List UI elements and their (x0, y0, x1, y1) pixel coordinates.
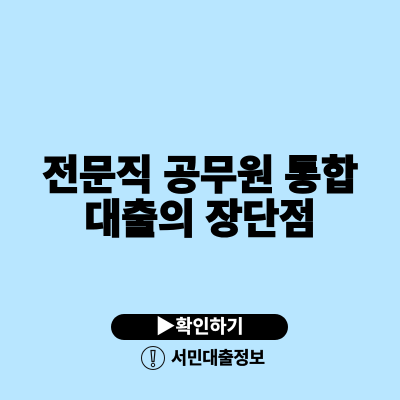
button: 확인하기 (111, 314, 288, 340)
icon: exclamation circle (141, 346, 165, 370)
brand name: 서민대출정보 (171, 348, 265, 368)
title (42, 152, 358, 242)
title: 전문직 공무원 통합 (42, 152, 358, 198)
title: 대출의 장단점 (84, 196, 316, 242)
button: 확인하기: ▶확인하기 (155, 316, 244, 338)
brand: 서민대출정보 (141, 346, 265, 370)
